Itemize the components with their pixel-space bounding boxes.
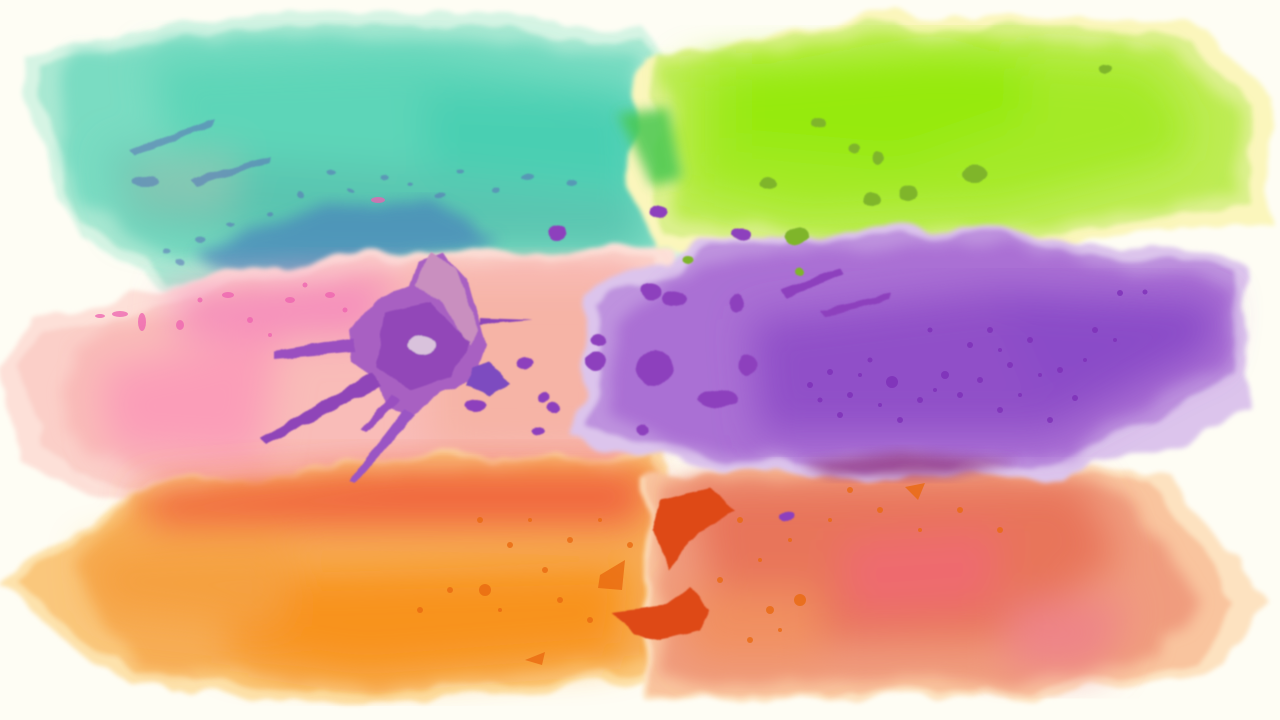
dark red splashes [612,488,735,640]
purple droplets [465,206,890,521]
panel: teal wash [24,8,690,290]
panel: green wash [618,16,1272,252]
panel: orange wash [0,452,672,708]
panel: pink wash [0,250,670,500]
purple speckles [807,290,1148,423]
dark blue wash in teal [190,203,500,276]
panel: coral wash [645,462,1262,700]
dark band under purple [800,452,1020,476]
dark green edge [618,108,682,186]
panel: purple wash [570,226,1250,476]
orange speckles [417,483,1003,665]
icon: central purple splat [260,252,532,483]
pink speckles [95,197,385,337]
blue speckles [130,118,577,265]
green droplets [683,65,1112,276]
